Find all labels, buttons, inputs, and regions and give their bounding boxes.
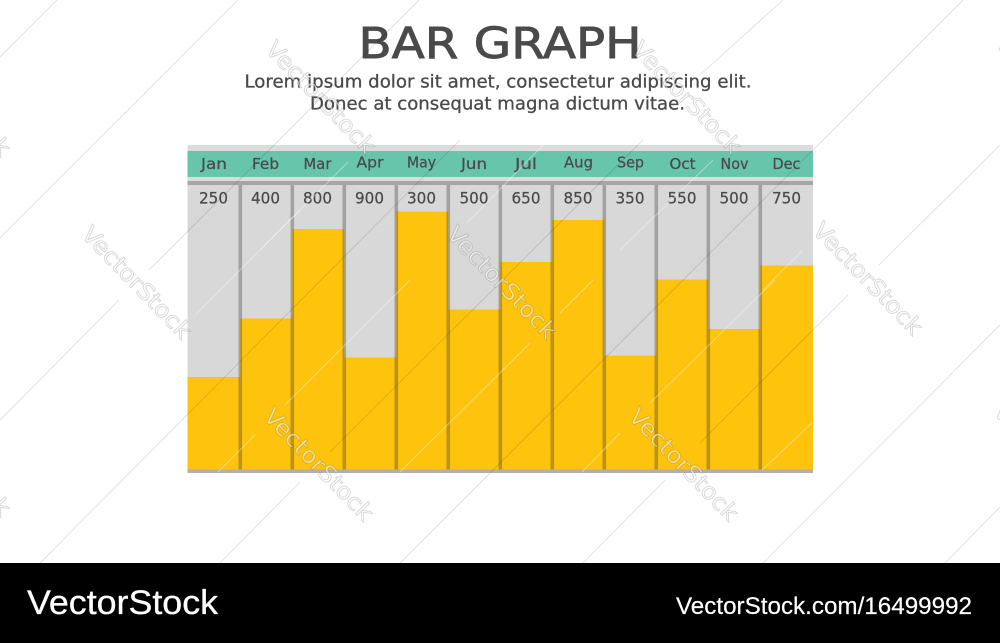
bar value labels: 750 [772, 188, 801, 208]
footer brand: VectorStock [27, 584, 219, 622]
watermark labels: VectorStock [807, 218, 928, 341]
column separators [238, 185, 762, 470]
title: BAR GRAPH [358, 19, 642, 69]
bar chart [188, 145, 813, 473]
month labels: Nov [720, 155, 749, 173]
bar value labels: 900 [355, 188, 384, 208]
bar value labels: 800 [303, 188, 332, 208]
footer image id: VectorStock.com/16499992 [676, 593, 972, 620]
yellow bars [188, 212, 813, 470]
subtitle text: Lorem ipsum dolor sit amet, consectetur adipiscing elit. [244, 72, 752, 92]
bar value labels: 400 [251, 188, 280, 208]
bar value labels: 650 [512, 188, 540, 208]
bar value labels: 550 [668, 188, 696, 208]
chart baseline [188, 470, 813, 473]
month labels [200, 154, 800, 173]
watermark labels: VectorStock [623, 404, 744, 527]
watermark labels [0, 31, 1000, 527]
bar value labels [199, 188, 801, 208]
month labels: Aug [564, 154, 593, 172]
month labels: Jul [514, 155, 537, 173]
month header band [188, 145, 813, 185]
subtitle text: Donec at consequat magna dictum vitae. [310, 94, 685, 114]
month labels: Oct [670, 155, 696, 173]
month labels: Feb [252, 155, 279, 173]
watermark labels: VectorStock [441, 222, 562, 345]
watermark labels: VectorStock [76, 222, 197, 345]
month labels: Jun [460, 155, 487, 173]
bar value labels: 500 [720, 188, 748, 208]
month labels: Apr [356, 154, 384, 172]
month labels: Dec [772, 155, 800, 173]
bar value labels: 500 [460, 188, 488, 208]
bar value labels: 250 [199, 188, 228, 208]
grey column background [188, 185, 813, 470]
month labels: Sep [617, 154, 644, 172]
footer bar [0, 563, 1000, 643]
month labels: May [407, 154, 436, 172]
subtitle text [244, 72, 752, 114]
watermark labels: VectorStock [260, 37, 381, 160]
bar value labels: 350 [616, 188, 644, 208]
bar value labels: 850 [564, 188, 592, 208]
watermark labels: VectorStock [258, 404, 379, 527]
watermark labels: VectorStock [626, 37, 747, 160]
bar value labels: 300 [407, 188, 436, 208]
month labels: Mar [304, 155, 332, 173]
month labels: Jan [200, 155, 227, 173]
